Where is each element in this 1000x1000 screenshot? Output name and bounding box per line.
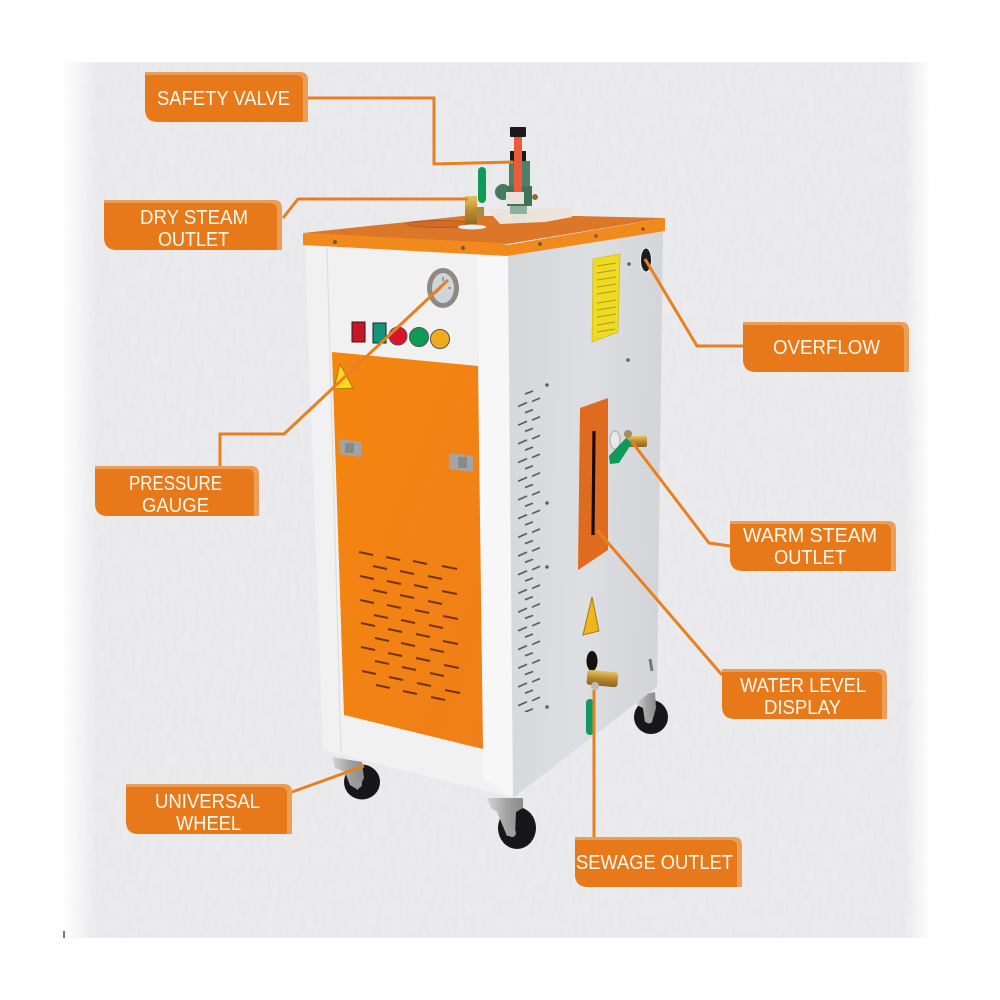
leader: water level display bbox=[597, 530, 722, 675]
leader lines bbox=[220, 98, 743, 837]
label: dry steam outlet: OUTLET bbox=[158, 229, 229, 251]
orange door panel bbox=[332, 352, 483, 749]
side panel screws bbox=[545, 262, 631, 709]
pressure gauge dial bbox=[427, 268, 459, 308]
label: warm steam outlet bbox=[730, 521, 896, 571]
door warning triangle bbox=[334, 364, 353, 389]
label: water level display: WATER LEVEL bbox=[740, 675, 866, 697]
leader: pressure gauge bbox=[220, 280, 448, 466]
cabinet front face bbox=[305, 245, 514, 798]
front frame seam bbox=[327, 248, 341, 752]
door handles bbox=[339, 439, 473, 472]
label: water level display: DISPLAY bbox=[764, 697, 841, 719]
caster wheel: front bbox=[487, 798, 536, 849]
cabinet corner post bbox=[478, 253, 514, 798]
label: universal wheel bbox=[126, 784, 292, 835]
caster wheel: rear right bbox=[634, 692, 668, 734]
lid circular plate bbox=[407, 220, 473, 228]
side ventilation slots bbox=[518, 390, 542, 712]
lid highlight plate bbox=[487, 208, 572, 224]
lid rivets bbox=[333, 227, 645, 250]
top lid surface bbox=[303, 216, 665, 244]
label: water level display bbox=[722, 669, 887, 719]
label: pressure gauge: GAUGE bbox=[142, 495, 209, 517]
label: warm steam outlet: WARM STEAM bbox=[743, 525, 877, 547]
leader: safety valve bbox=[308, 98, 513, 164]
label: universal wheel: UNIVERSAL bbox=[155, 791, 260, 813]
small side latch bbox=[650, 659, 652, 671]
leader: warm steam outlet bbox=[632, 442, 730, 546]
label: overflow: OVERFLOW bbox=[773, 337, 880, 359]
label: safety valve bbox=[145, 72, 308, 122]
caster wheel: left bbox=[332, 757, 380, 800]
label: dry steam outlet bbox=[104, 200, 282, 251]
dry steam outlet valve bbox=[458, 167, 486, 230]
label: safety valve: SAFETY VALVE bbox=[157, 88, 290, 110]
leader: overflow bbox=[645, 259, 743, 346]
lid front band bbox=[303, 218, 665, 256]
control buttons bbox=[352, 322, 450, 348]
label: pressure gauge bbox=[95, 466, 259, 517]
label: sewage outlet: SEWAGE OUTLET bbox=[576, 852, 733, 874]
water level display plate bbox=[578, 398, 608, 570]
label: dry steam outlet: DRY STEAM bbox=[140, 207, 248, 229]
warm steam outlet valve bbox=[609, 430, 647, 464]
cabinet side face bbox=[508, 231, 663, 798]
background panel bbox=[63, 62, 930, 938]
label: universal wheel: WHEEL bbox=[176, 813, 241, 835]
label: overflow bbox=[743, 322, 909, 372]
label: pressure gauge: PRESSURE bbox=[129, 473, 222, 495]
sewage outlet valve bbox=[586, 651, 619, 735]
steam generator machine bbox=[303, 127, 668, 849]
leader: dry steam outlet bbox=[283, 199, 468, 218]
leader: sewage outlet bbox=[592, 690, 596, 837]
label: sewage outlet bbox=[575, 837, 742, 887]
safety valve bbox=[495, 127, 538, 222]
label: warm steam outlet: OUTLET bbox=[774, 547, 846, 569]
leader: universal wheel bbox=[292, 766, 364, 792]
door ventilation slots bbox=[359, 552, 460, 700]
side warning triangle bbox=[583, 597, 599, 635]
overflow port bbox=[640, 248, 652, 272]
yellow notice label bbox=[592, 254, 620, 342]
